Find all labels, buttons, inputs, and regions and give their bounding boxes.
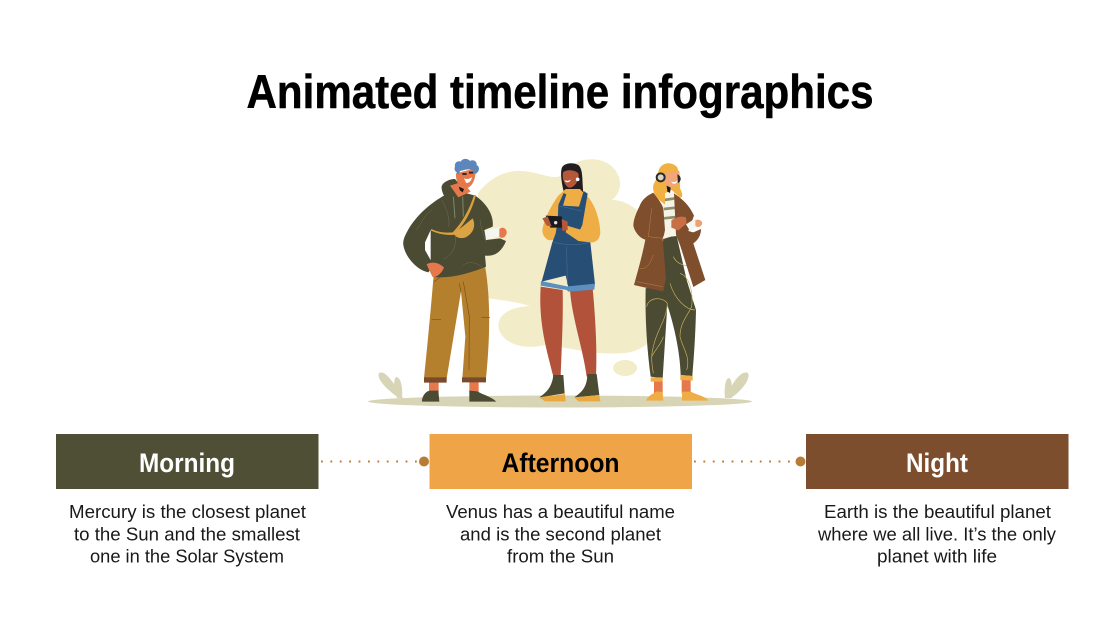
background blobs (478, 159, 667, 376)
text block: morning: to the Sun and the smallest (74, 524, 300, 544)
text block: night: where we all live. It’s the only (817, 524, 1057, 544)
heading: night: Night (906, 448, 968, 478)
heading: afternoon: Afternoon (502, 448, 620, 478)
text block: afternoon: from the Sun (507, 546, 614, 566)
illustration: three people standing (368, 159, 752, 408)
figure: woman in denim overalls (539, 163, 600, 401)
text block: night: Earth is the beautiful planet (824, 501, 1051, 522)
text block: night (817, 501, 1057, 566)
connector: afternoon to night (694, 456, 806, 466)
heading: night (806, 434, 1068, 489)
title: Animated timeline infographics (246, 65, 874, 118)
text block: afternoon: and is the second planet (460, 524, 661, 544)
heading: morning: Morning (139, 448, 235, 478)
panel: afternoon (430, 434, 692, 566)
ground shadow (368, 396, 752, 408)
text block: morning: one in the Solar System (90, 546, 284, 566)
panel: night (806, 434, 1068, 566)
connector: morning to afternoon (321, 456, 429, 466)
text block: afternoon: Venus has a beautiful name (446, 501, 675, 522)
figure: woman with headphones (633, 163, 709, 401)
panel: morning (56, 434, 318, 566)
text block: morning (69, 501, 306, 566)
icon: right leaves (725, 372, 749, 398)
figure: man with fanny pack (403, 159, 507, 402)
icon: left leaves (379, 372, 403, 398)
text block: morning: Mercury is the closest planet (69, 501, 306, 522)
text block: afternoon (446, 501, 675, 566)
heading: morning (56, 434, 318, 489)
text block: night: planet with life (877, 546, 997, 566)
heading: afternoon (430, 434, 692, 489)
